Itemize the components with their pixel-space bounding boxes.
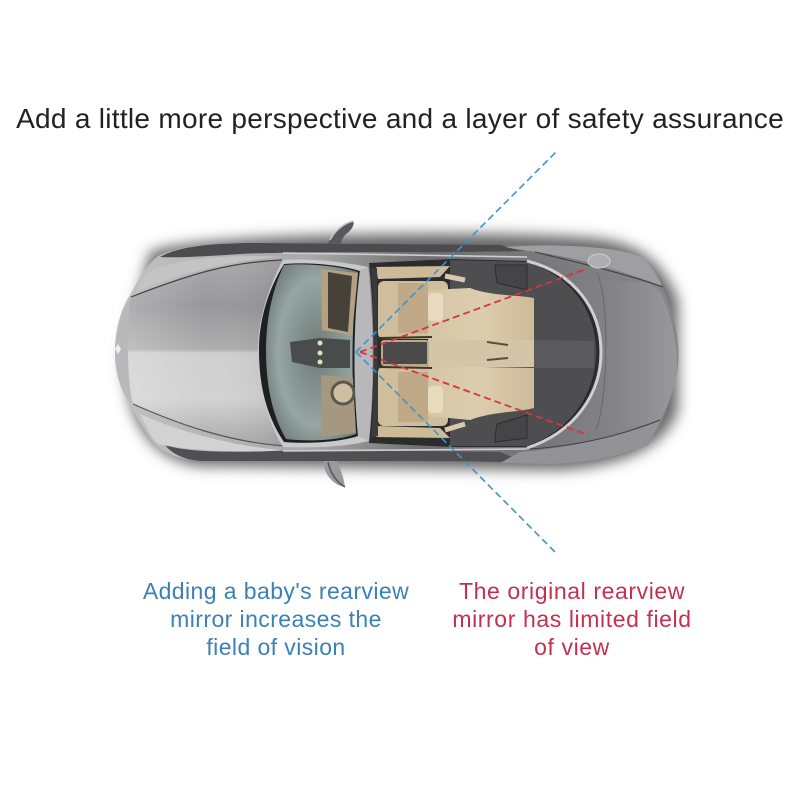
rear seats [428, 288, 534, 340]
windshield [258, 259, 373, 447]
rear upper fender [505, 245, 662, 286]
dark bottom sill [165, 445, 525, 462]
dashboard seen through glass [321, 269, 358, 335]
shadow [124, 234, 678, 470]
red dashed lines: limited field of view [360, 269, 588, 435]
rear seam [596, 273, 606, 430]
blue dashed lines: increased field of vision [356, 150, 558, 554]
front fender highlights [135, 256, 282, 292]
front grille nose [115, 297, 133, 404]
center console [382, 341, 428, 365]
side panels [376, 266, 450, 279]
caption: red: of view [534, 634, 610, 660]
caption: blue: Adding a baby's rearview [143, 578, 409, 604]
caption: blue: field of vision [206, 634, 346, 660]
caption: blue [143, 578, 409, 660]
open cabin [369, 259, 601, 448]
dark top sill [160, 243, 525, 257]
car body [115, 243, 678, 464]
mirror: top [326, 221, 354, 250]
caption: red [452, 578, 692, 660]
title: Add a little more perspective and a layer of safety assurance [16, 103, 784, 134]
caption: blue: mirror increases the [170, 606, 382, 632]
tonneau cover [450, 260, 596, 446]
mirror: bottom [323, 456, 345, 487]
diagonal seat belts [445, 276, 465, 430]
front seat bottom [378, 366, 448, 426]
front seat top [378, 281, 448, 339]
fuel cap [588, 254, 610, 268]
rear lower fender [500, 420, 660, 464]
chrome door lines [283, 253, 527, 451]
caption: red: The original rearview [459, 578, 685, 604]
a-pillar frame [354, 267, 373, 441]
caption: red: mirror has limited field [452, 606, 692, 632]
chrome arc [527, 261, 601, 448]
hood [128, 260, 284, 446]
rear deck [527, 259, 677, 449]
